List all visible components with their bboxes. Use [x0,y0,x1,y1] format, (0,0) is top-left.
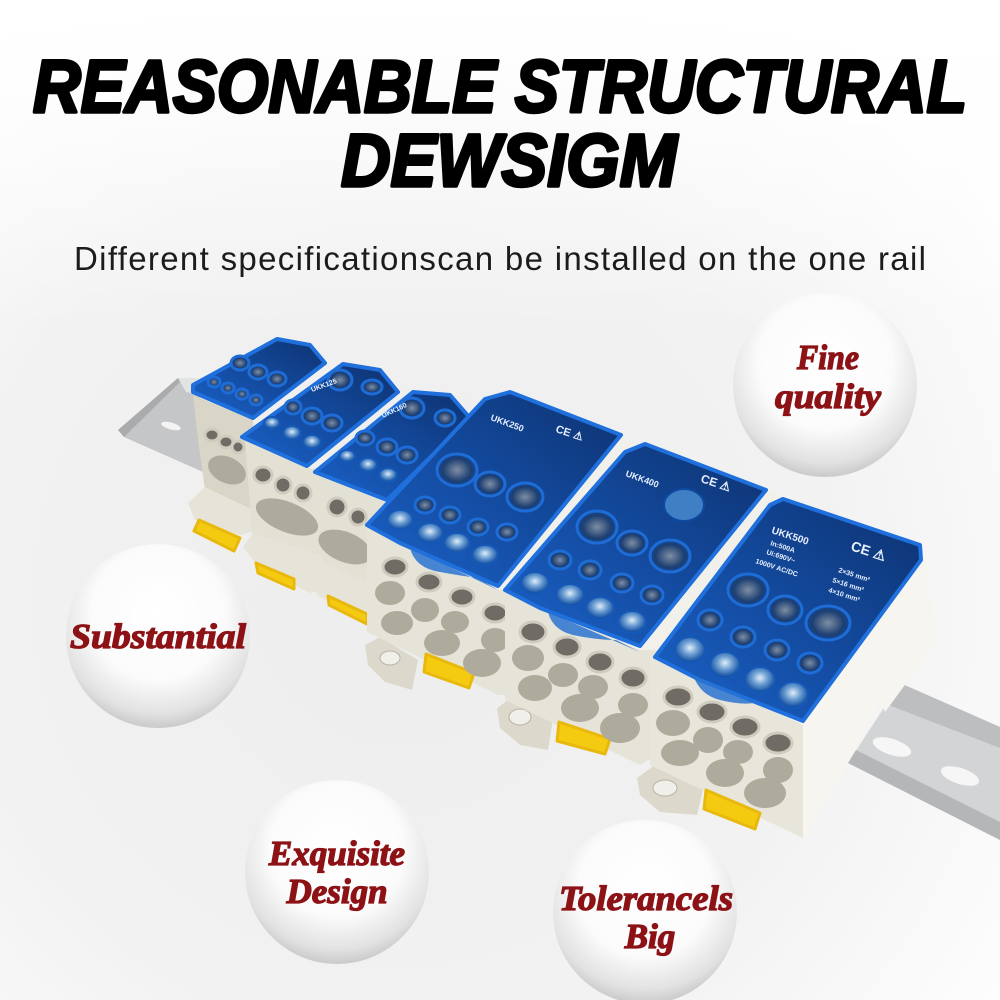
lid text 5 [624,468,733,494]
lid text 6: 1000V AC/DC [754,558,798,579]
din rail right [848,683,1000,840]
lid text 6: 4×10 mm² [827,587,861,604]
yellow clip 1 [194,520,240,551]
lid 3 [315,392,470,500]
holes 5 [521,489,704,633]
lid text 6: 2×35 mm² [837,567,871,584]
terminal block 5 [497,444,788,765]
badge: fine quality: quality [775,377,881,416]
flap 4 [410,548,498,590]
lid text 6: UKK500 [770,525,810,548]
terminal block 6 [637,499,938,838]
lid text 6: In:500A [769,540,796,555]
yellow clip 4 [424,654,474,688]
title: DEWSIGM [341,119,678,202]
lid text 6: Ui:690V~ [765,549,796,565]
badge: exquisite design: Design [285,872,388,911]
holes 2 [251,370,382,543]
lid text 6: 5×16 mm² [831,577,865,594]
holes 3 [313,398,455,571]
body 3 [315,473,390,595]
side wall 6 [803,552,938,838]
label 2: UKK125 [310,378,338,394]
badge: substantial: Substantial [70,617,246,656]
badge: tolerancels big: Big [624,917,675,956]
yellow clip 3 [328,596,367,624]
terminal block 4 [365,392,642,695]
badge: exquisite design: Exquisite [268,834,405,873]
lid 6 [655,499,921,721]
lid text 6 [754,525,889,604]
lid text 4: UKK250 [489,412,525,434]
terminal block 1 [188,339,325,551]
holes 1 [203,356,286,490]
foot 3 [313,563,380,627]
body 1 [193,395,258,512]
holes 4 [387,454,543,565]
foot 1 [188,487,258,535]
badge: exquisite design [245,780,429,964]
yellow clip 2 [256,563,294,589]
terminal block 3 [313,392,470,627]
label 3: UKK160 [381,402,408,420]
title [33,45,967,202]
badge: fine quality [733,293,917,477]
terminal block 2 [242,364,398,593]
lid text 5: UKK400 [624,468,660,490]
flap 6 [693,675,803,725]
side strip 4 [498,437,642,605]
lug 4 [365,637,418,690]
body 2 [245,438,332,562]
front ports 5 [512,622,648,743]
front ports 4 [375,558,509,677]
lid text 4: CE ⚠ [554,423,585,444]
lid text 6: CE ⚠ [849,538,889,564]
lid 1 [193,339,325,418]
lug 6 [637,765,703,815]
lid 5 [505,444,766,646]
front ports 6 [656,687,793,808]
flap 5 [548,612,640,652]
lid 2 [242,364,398,466]
subtitle: Different specificationscan be installed on the one rail [74,240,926,277]
body 4 [367,527,512,695]
body 5 [505,592,657,765]
yellow clip 5 [557,722,610,754]
lid text 5: CE ⚠ [699,472,733,494]
lid text 4 [489,412,585,444]
foot 2 [243,533,327,593]
badge: fine quality: Fine [796,338,859,377]
holes 6 [675,574,850,708]
yellow clip 6 [704,790,760,829]
badge: tolerancels big: Tolerancels [559,879,733,918]
top fade [0,0,1000,330]
body 6 [650,657,803,838]
badge: tolerancels big [553,820,737,1000]
badge: substantial [66,544,250,728]
din rail left [118,378,210,475]
side strip 5 [640,490,788,668]
lid 4 [367,392,621,586]
lug 5 [497,695,553,750]
